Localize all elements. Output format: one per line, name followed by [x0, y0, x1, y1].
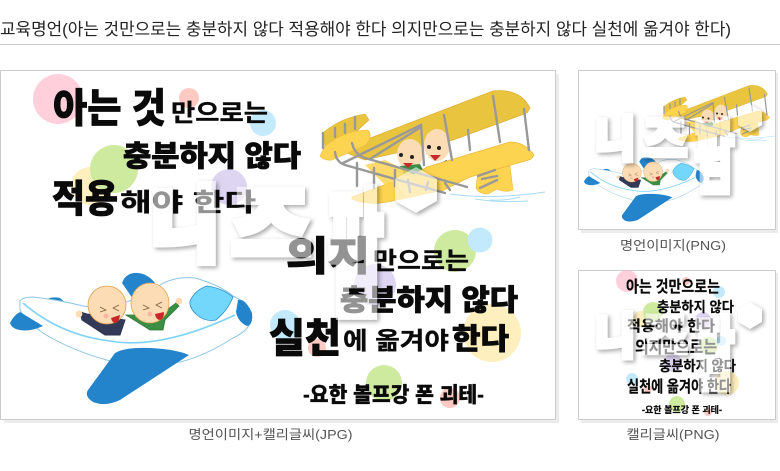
thumbnail: blue airplane: [584, 157, 704, 222]
calligraphy text: 실천: [269, 317, 341, 361]
thumbnail calligraphy text: 아는 것만으로는: [626, 278, 720, 296]
thumbnail: yellow biplane: [662, 85, 775, 142]
calligraphy text: -요한 볼프강 폰 괴테-: [303, 384, 484, 407]
calligraphy text: 해야 한다: [120, 189, 256, 217]
watermark: 팜: [328, 180, 384, 334]
thumbnail calligraphy text: 실천에 옮겨야 한다: [627, 378, 731, 396]
calligraphy text: [52, 87, 518, 407]
thumbnail watermark: 니: [595, 114, 635, 167]
thumbnail calligraphy text: 충분하지 않다: [657, 299, 734, 315]
calligraphy text: 의지: [286, 235, 370, 279]
illustration: yellow biplane: [320, 91, 545, 203]
pastel circles: [33, 74, 521, 408]
thumbnail watermark: 팜: [694, 114, 735, 203]
calligraphy text: 만으로는: [171, 100, 268, 127]
thumbnail watermark: [595, 302, 762, 400]
thumbnail calligraphy text: 의지만으로는: [635, 338, 717, 357]
thumbnail watermark: 니: [595, 311, 635, 364]
thumbnail watermark: 즈: [643, 311, 687, 364]
title: 교육명언(아는 것만으로는 충분하지 않다 적용해야 한다 의지만으로는 충분하지 않다 실천에 옮겨야 한다): [0, 20, 731, 39]
caption: main image: 명언이미지+캘리글씨(JPG): [188, 427, 352, 442]
thumbnail watermark: [595, 104, 762, 203]
calligraphy text: 에 옮겨야: [343, 328, 449, 355]
caption: illustration thumbnail: 명언이미지(PNG): [620, 238, 726, 253]
thumbnail circles: [616, 270, 739, 416]
watermark: 니: [151, 181, 219, 272]
watermark: [151, 167, 437, 334]
panel: main image with calligraphy: [0, 70, 559, 423]
thumbnail watermark: 즈: [643, 114, 687, 167]
thumbnail calligraphy text: -요한 볼프강 폰 괴테-: [642, 404, 722, 415]
watermark: 즈: [232, 181, 310, 272]
thumbnail calligraphy text: [626, 278, 736, 415]
calligraphy text: 아는 것: [53, 87, 166, 131]
caption: calligraphy thumbnail: 캘리글씨(PNG): [626, 427, 720, 442]
calligraphy text: 충분하지 않다: [340, 284, 518, 317]
panel: illustration thumbnail: [578, 70, 778, 233]
thumbnail calligraphy text: 적용해야 한다: [627, 318, 715, 335]
calligraphy text: 적용: [52, 179, 118, 221]
panel: calligraphy thumbnail: [578, 270, 778, 423]
illustration: blue airplane: [10, 273, 252, 404]
thumbnail calligraphy text: 충분하지 않다: [659, 358, 736, 374]
calligraphy text: 충분하지 않다: [123, 140, 301, 173]
calligraphy text: 만으로는: [373, 248, 469, 275]
thumbnail watermark: 팜: [694, 311, 735, 400]
calligraphy text: 한다: [452, 323, 509, 356]
